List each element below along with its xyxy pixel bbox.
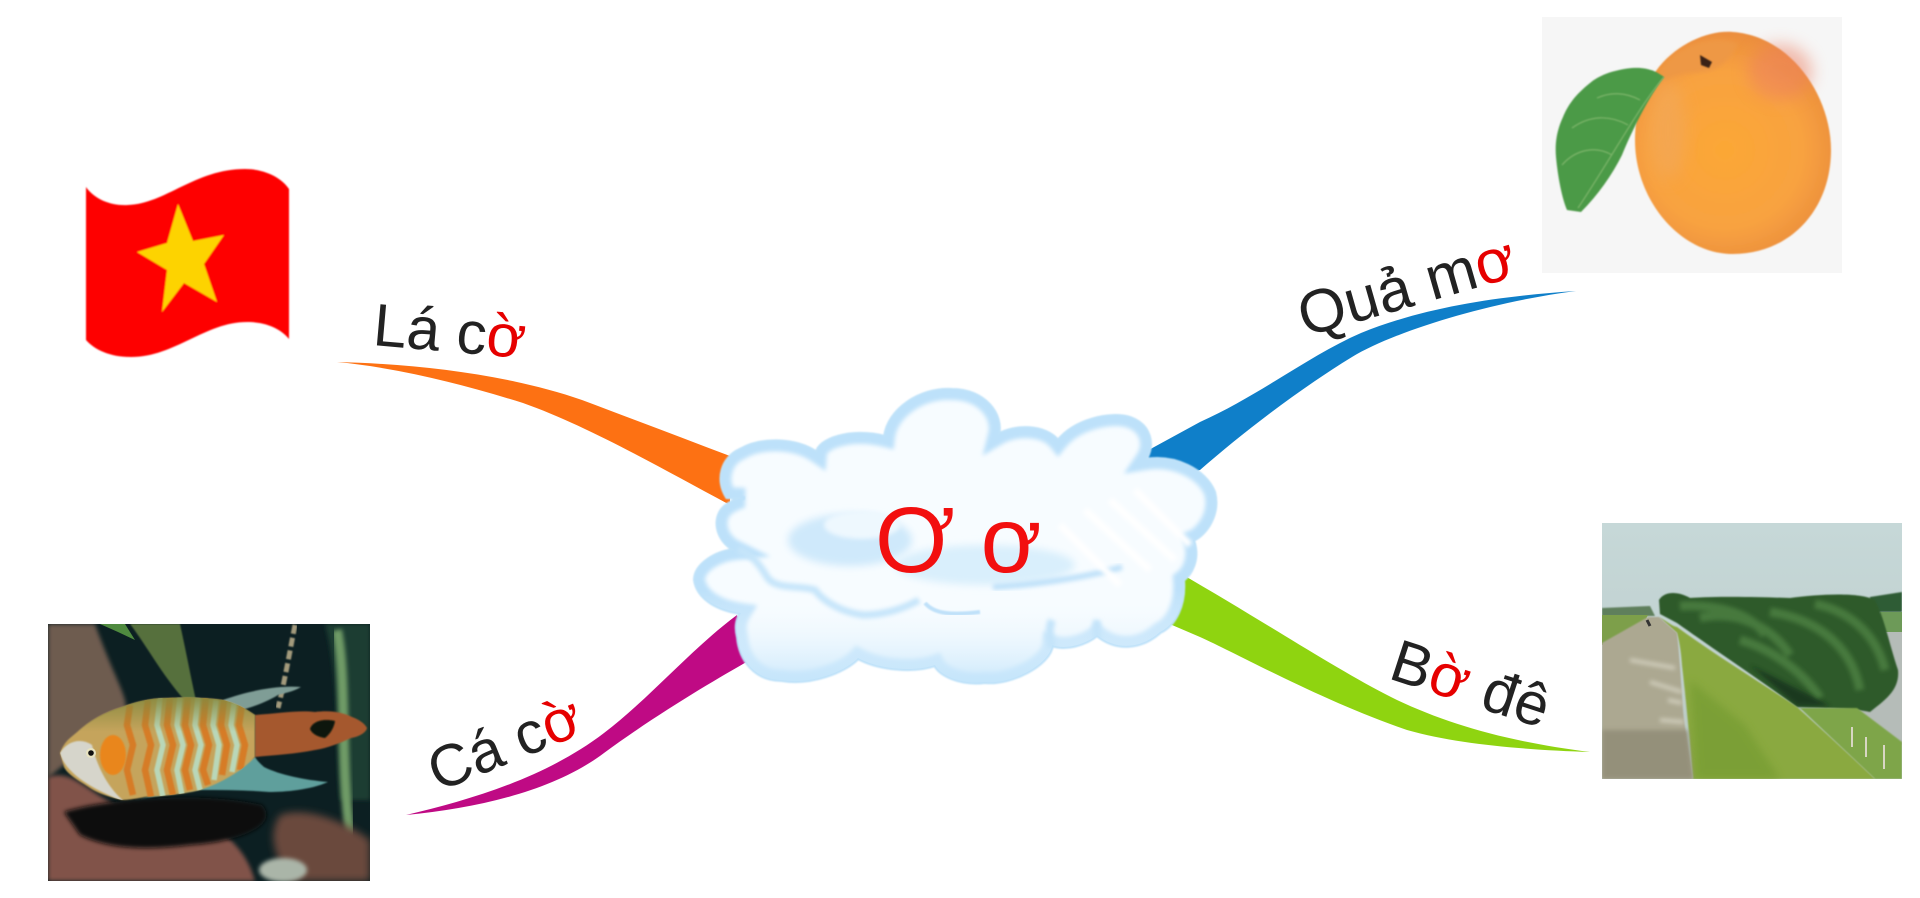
picture: paradise fish [48,624,370,882]
concrete road [1602,617,1693,779]
branch: blue [1145,291,1576,480]
picture: dyke road [1602,523,1902,779]
center title: Ơ ơ: Ơ ơ [875,488,1042,592]
branch: lime green [1165,572,1590,752]
willow trees [1659,593,1898,712]
label: Quả mơ: Quả mơ [1290,223,1523,349]
fish body [55,695,260,802]
picture: apricot with leaf [1542,17,1842,273]
branch: orange [337,362,730,505]
central cloud [690,390,1220,685]
label: Cá cờ: Cá cờ [418,683,591,804]
rock and shadow [48,775,255,881]
branch: magenta [406,615,750,815]
roadside light-green verge [1800,708,1902,779]
label: Bờ đê: Bờ đê [1383,627,1559,741]
apricot leaf [1556,68,1664,212]
grass slope [1659,617,1875,779]
picture: Vietnamese flag [86,169,289,357]
distant treelines and water [1602,606,1655,616]
label: Lá cờ: Lá cờ [371,291,529,371]
fish fins [223,687,301,712]
